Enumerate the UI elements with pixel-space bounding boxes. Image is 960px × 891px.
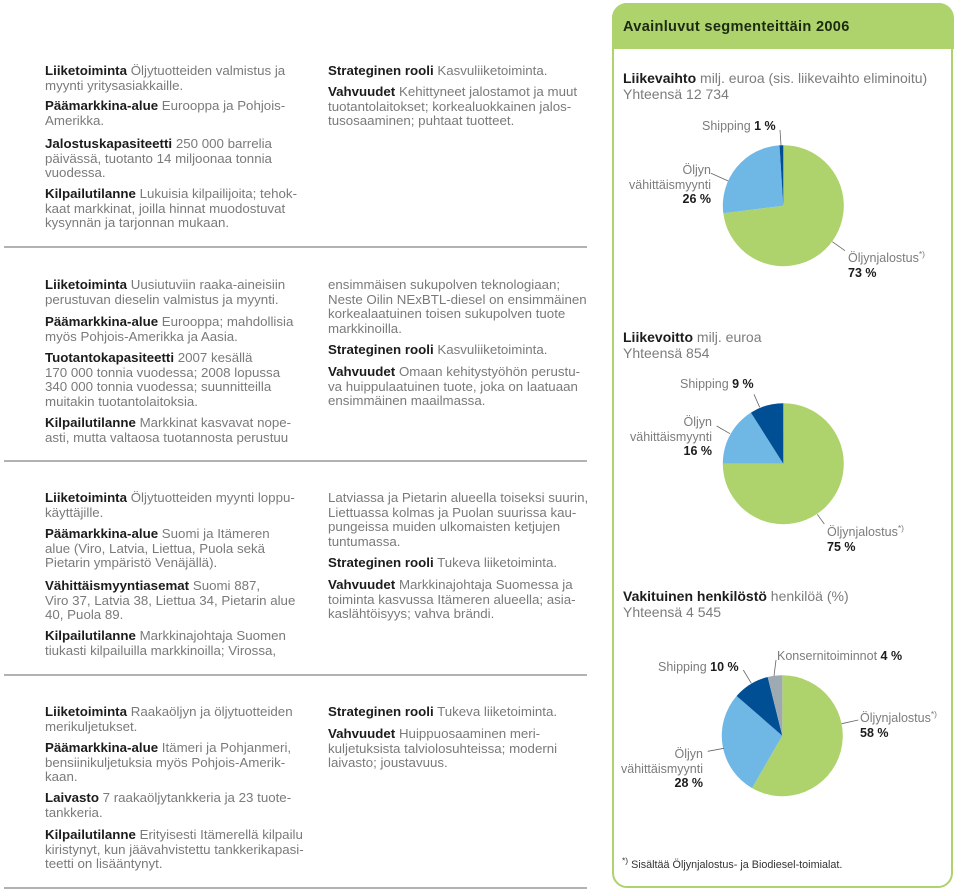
panel: retail segment description [45, 490, 588, 658]
text: retail business [45, 490, 295, 520]
text: shipping competition [45, 827, 304, 871]
label: retail: 26 % [682, 192, 711, 206]
text: retail stations [45, 578, 295, 622]
text: biodiesel strengths: Vahvuudet Omaan kehitystyöhön perustu- [328, 364, 580, 379]
label: group functions: Konsernitoiminnot 4 % [777, 649, 902, 663]
label: retail: 16 % [684, 444, 712, 458]
text: biodiesel market area: myös Pohjois-Amerikka ja Aasia. [45, 329, 238, 344]
text: refining capacity [45, 136, 272, 180]
label: refining: 58 % [860, 726, 888, 740]
label: retail [629, 163, 711, 206]
text: biodiesel capacity [45, 350, 280, 409]
text: retail competition continued: pungeissa muiden ulkomaisten ketjujen [328, 519, 560, 534]
text: refining business: myynti yritysasiakkaille. [45, 78, 183, 93]
text: biodiesel capacity: Tuotantokapasiteetti 2007 kesällä [45, 350, 252, 365]
text: biodiesel strengths: ensimmäinen maailmassa. [328, 393, 485, 408]
heading: net sales: Yhteensä 12 734 [623, 86, 729, 102]
text: retail stations: Viro 37, Latvia 38, Liettua 34, Pietarin alue [45, 593, 295, 608]
text: retail stations: 40, Puola 89. [45, 607, 123, 622]
text: biodiesel competition [45, 415, 291, 445]
text: retail competition continued: Latviassa ja Pietarin alueella toiseksi suurin, [328, 490, 588, 505]
heading: personnel: Yhteensä 4 545 [623, 604, 721, 620]
text: refining strengths: Vahvuudet Kehittyneet jalostamot ja muut [328, 84, 577, 99]
text: refining competition [45, 186, 297, 230]
heading: operating profit [623, 329, 762, 361]
label: retail: vähittäismyynti [621, 762, 703, 776]
text: biodiesel capacity: 170 000 tonnia vuodessa; 2008 lopussa [45, 365, 280, 380]
text: refining business [45, 63, 286, 93]
text: retail strengths: toiminta kasvussa Itämeren alueella; asia- [328, 592, 576, 607]
pie: net sales shares [710, 130, 846, 266]
text: shipping market area: bensiinikuljetuksia myös Pohjois-Amerik- [45, 755, 285, 770]
text: biodiesel competition continued: ensimmäisen sukupolven teknologiaan; [328, 277, 560, 292]
panel heading: key figures by segment [612, 3, 954, 49]
pie: personnel shares [612, 580, 954, 805]
text: biodiesel business: Liiketoiminta Uusiutuviin raaka-aineisiin [45, 277, 285, 292]
chart: net sales [623, 70, 927, 280]
text: retail strengths: Vahvuudet Markkinajohtaja Suomessa ja [328, 577, 573, 592]
text: retail strengths: kaslähtöisyys; vahva brändi. [328, 606, 494, 621]
label: retail [621, 747, 703, 791]
heading: operating profit: Yhteensä 854 [623, 345, 709, 361]
text: shipping strengths: laivasto; joustavuus. [328, 755, 448, 770]
text: refining capacity: vuodessa. [45, 165, 106, 180]
text: shipping competition: Kilpailutilanne Erityisesti Itämerellä kilpailu [45, 827, 303, 842]
label: retail: 28 % [674, 776, 703, 790]
label: refining [848, 249, 925, 280]
label: retail: vähittäismyynti [629, 178, 711, 192]
text: refining competition: Kilpailutilanne Lukuisia kilpailijoita; tehok- [45, 186, 297, 201]
text: retail market area: alue (Viro, Latvia, Liettua, Puola sekä [45, 541, 265, 556]
text: shipping strengths: Vahvuudet Huippuosaaminen meri- [328, 726, 540, 741]
text: refining strategic role: Strateginen rooli Kasvuliiketoiminta. [328, 63, 547, 78]
label: retail [630, 415, 712, 459]
text: refining market area: Amerikka. [45, 113, 104, 128]
panel: key figures frame [612, 3, 953, 888]
text: retail competition [45, 628, 286, 658]
label: shipping: Shipping 9 % [680, 377, 754, 391]
text: retail competition: tiukasti kilpailuilla markkinoilla; Virossa, [45, 643, 276, 658]
text: retail competition: Kilpailutilanne Markkinajohtaja Suomen [45, 628, 286, 643]
heading: net sales [623, 70, 927, 102]
text: refining market area [45, 98, 285, 128]
pie: operating profit shares [716, 394, 844, 524]
text: retail competition continued: tuntumassa. [328, 534, 400, 549]
text: refining competition: kaat markkinat, joilla hinnat muodostuvat [45, 201, 285, 216]
text: shipping strategic role: Strateginen rooli Tukeva liiketoiminta. [328, 704, 557, 719]
text: refining competition: kysynnän ja tarjonnan mukaan. [45, 215, 229, 230]
text: biodiesel competition continued [328, 277, 587, 336]
chart: operating profit [623, 329, 904, 554]
text: biodiesel competition continued: Neste Oilin NExBTL-diesel on ensimmäinen [328, 292, 587, 307]
text: retail stations: Vähittäismyyntiasemat Suomi 887, [45, 578, 260, 593]
text: retail strengths [328, 577, 576, 621]
text: biodiesel strengths: va huippulaatuinen tuote, joka on laatuaan [328, 379, 578, 394]
text: refining market area: Päämarkkina-alue Eurooppa ja Pohjois- [45, 98, 285, 113]
label: refining: Öljynjalostus*) [827, 523, 904, 539]
text: shipping market area: Päämarkkina-alue Itämeri ja Pohjanmeri, [45, 740, 291, 755]
text: shipping fleet [45, 790, 291, 820]
label: refining: 73 % [848, 266, 876, 280]
text: biodiesel capacity: 340 000 tonnia vuodessa; suunnitteilla [45, 379, 271, 394]
panel: refining segment description [45, 63, 577, 230]
heading: personnel [623, 588, 849, 621]
label: refining: Öljynjalostus*) [848, 249, 925, 265]
label: refining [860, 711, 937, 740]
text: refining capacity: Jalostuskapasiteetti 250 000 barrelia [45, 136, 272, 151]
text: refining strengths: tusosaaminen; puhtaat tuotteet. [328, 113, 514, 128]
chart: personnel [612, 580, 954, 805]
label: shipping: Shipping 1 % [702, 119, 776, 133]
text: shipping fleet: tankkeria. [45, 805, 103, 820]
footnote: *) Sisältää Öljynjalostus- ja Biodiesel-toimialat. [622, 855, 842, 871]
text: retail business: Liiketoiminta Öljytuotteiden myynti loppu- [45, 490, 295, 505]
text: biodiesel market area: Päämarkkina-alue Eurooppa; mahdollisia [45, 314, 293, 329]
text: refining business: Liiketoiminta Öljytuotteiden valmistus ja [45, 63, 285, 78]
text: retail business: käyttäjille. [45, 505, 103, 520]
panel: biodiesel segment description [45, 277, 587, 445]
label: retail: Öljyn [684, 415, 712, 429]
text: shipping strengths [328, 726, 557, 770]
text: shipping business: merikuljetukset. [45, 719, 137, 734]
text: biodiesel capacity: muitakin tuotantolaitoksia. [45, 394, 198, 409]
panel heading: key figures by segment: Avainluvut segmenteittäin 2006 [623, 19, 850, 35]
heading: personnel: Vakituinen henkilöstö henkilöä (%) [623, 588, 849, 604]
text: shipping market area [45, 740, 291, 784]
text: biodiesel strategic role: Strateginen rooli Kasvuliiketoiminta. [328, 342, 547, 357]
text: shipping market area: kaan. [45, 769, 78, 784]
text: shipping business: Liiketoiminta Raakaöljyn ja öljytuotteiden [45, 704, 293, 719]
text: retail competition continued [328, 490, 588, 549]
text: shipping strengths: kuljetuksista talviolosuhteissa; moderni [328, 741, 557, 756]
label: retail: vähittäismyynti [630, 430, 712, 444]
text: biodiesel competition: Kilpailutilanne Markkinat kasvavat nope- [45, 415, 291, 430]
label: shipping: Shipping 10 % [658, 660, 739, 674]
text: retail market area: Pietarin ympäristö Venäjällä). [45, 555, 217, 570]
text: shipping business [45, 704, 293, 734]
text: retail strategic role: Strateginen rooli Tukeva liiketoiminta. [328, 555, 557, 570]
label: refining: Öljynjalostus*) [860, 709, 937, 725]
label: refining: 75 % [827, 540, 856, 554]
divider lines [4, 246, 587, 889]
text: retail market area [45, 526, 270, 570]
text: shipping competition: kiristynyt, kun jäävahvistettu tankkerikapasi- [45, 842, 304, 857]
text: biodiesel strengths [328, 364, 580, 408]
text: biodiesel competition continued: markkinoilla. [328, 321, 402, 336]
text: shipping fleet: Laivasto 7 raakaöljytankkeria ja 23 tuote- [45, 790, 291, 805]
text: retail market area: Päämarkkina-alue Suomi ja Itämeren [45, 526, 270, 541]
text: refining strengths [328, 84, 577, 128]
text: refining strengths: tuotantolaitokset; korkealuokkainen jalos- [328, 99, 571, 114]
label: refining [827, 525, 904, 554]
text: biodiesel business [45, 277, 285, 307]
panel: shipping segment description [45, 704, 557, 871]
text: biodiesel competition continued: korkealaatuinen toisen sukupolven tuote [328, 306, 565, 321]
text: shipping competition: teetti on lisääntynyt. [45, 856, 163, 871]
text: biodiesel business: perustuvan dieselin valmistus ja myynti. [45, 292, 279, 307]
heading: net sales: Liikevaihto milj. euroa (sis. liikevaihto eliminoitu) [623, 70, 927, 86]
heading: operating profit: Liikevoitto milj. euroa [623, 329, 761, 345]
label: retail: Öljyn [675, 747, 703, 761]
text: biodiesel competition: asti, mutta valtaosa tuotannosta perustuu [45, 430, 288, 445]
text: biodiesel market area [45, 314, 294, 344]
text: refining capacity: päivässä, tuotanto 14 miljoonaa tonnia [45, 151, 272, 166]
text: retail competition continued: Liettuassa kolmas ja Puolan suurissa kau- [328, 505, 576, 520]
label: retail: Öljyn [683, 163, 711, 177]
